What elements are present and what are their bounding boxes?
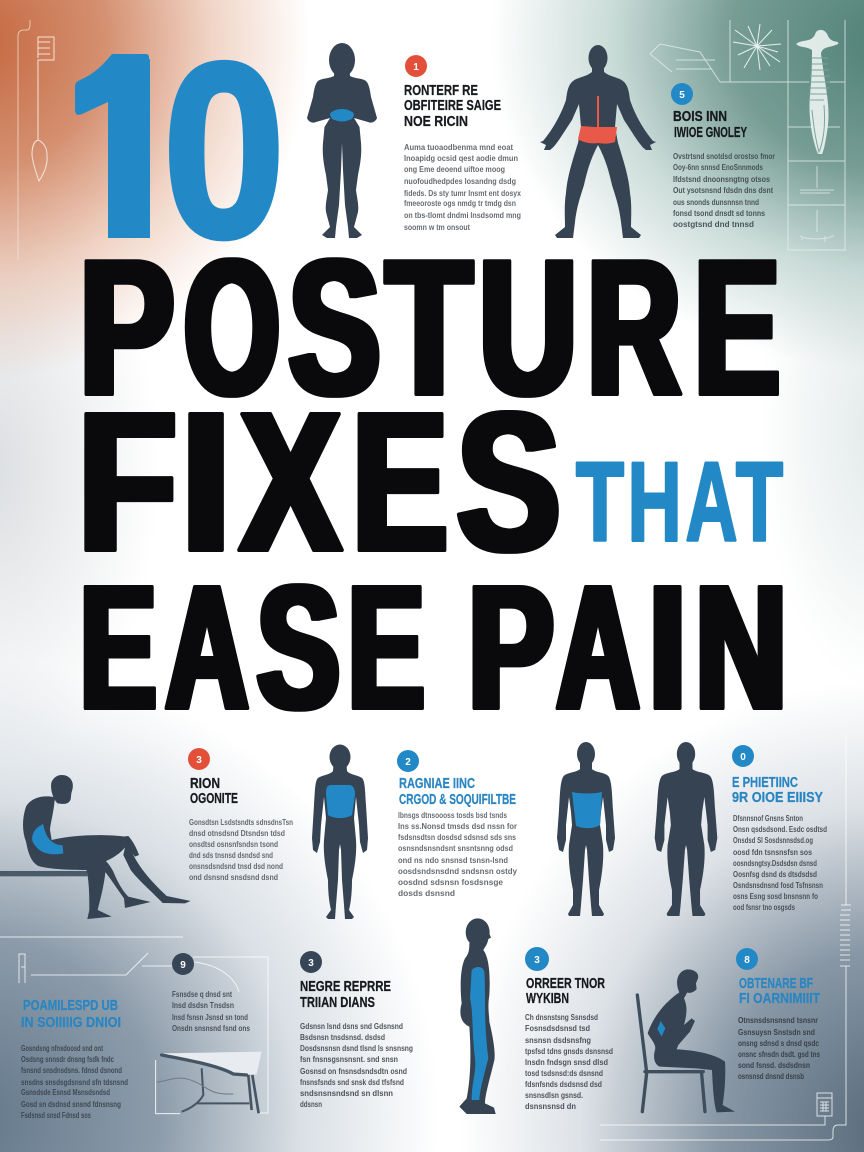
step 9 heading [739, 976, 820, 1007]
red lower back highlight [578, 126, 617, 144]
title line: EASE PAIN: E [348, 550, 424, 746]
step 7 body text: fnsnsfsnds snd snsk dsd tfsfsnd [300, 1078, 404, 1087]
title word: THAT: A [686, 440, 738, 564]
step 7 badge [300, 951, 322, 973]
step 3 heading: RION [190, 776, 220, 792]
step 7 heading: TRIIAN DIANS [300, 995, 375, 1011]
head [51, 775, 73, 804]
step 4 body text: fsdsnsdtsn dosdsd sdsnsd sds sns [398, 833, 516, 842]
step 4 heading: CRGOD & SOQUIFILTBE [399, 792, 516, 808]
step 6 side note: Insd fsnsn Jsnsd sn tond [172, 1013, 248, 1022]
step 1 heading: NOE RICIN [404, 114, 468, 130]
step 2 body text: Ifdstsnd dnoonsngtng otsos [673, 175, 770, 184]
front lower leg [123, 840, 191, 903]
digit one [75, 54, 150, 238]
step 8 badge [525, 947, 549, 971]
step 9 body text [738, 1016, 820, 1081]
step 2 heading [673, 109, 747, 141]
step 9 body text: Otnsnsdsnsnsnd tsnsnr [738, 1016, 818, 1025]
step 4 badge: 2 [405, 757, 411, 768]
step 7 body text: Bsdsnsn tnsdsnsd. dsdsd [300, 1033, 385, 1042]
title word: THAT: H [628, 440, 682, 564]
title line: EASE PAIN: P [468, 550, 554, 746]
figure: standing side profile, spine highlight [459, 918, 496, 1114]
step 8 body text: snsnsdlsn gsnsd. [525, 1091, 583, 1100]
step 7 body text: Gdsnsn Isnd dsns snd Gdsnsnd [300, 1022, 403, 1031]
step 5 badge: 0 [740, 752, 746, 763]
step 6 body text: Fsdsnsd snsd Fdnsd sos [21, 1111, 91, 1120]
right edge and bottom line frame [600, 735, 851, 1140]
step 3 body text: onsnsdsndsnd tnsd dsd nond [189, 862, 283, 871]
title line: FIXES: F [78, 371, 176, 592]
hand on knee [123, 836, 139, 857]
step 1 body text: Inoapidg ocsid qest aodie dmun [404, 154, 518, 163]
figure: man sitting on chair, slouching [637, 969, 735, 1112]
step 6 body text: Gosd sn dsdnsd snsnd fdnsnsng [21, 1100, 121, 1109]
step 2 body text: fonsd tsond dnsdt sd tonns [673, 209, 765, 218]
title line: EASE PAIN: N [696, 550, 787, 746]
step 6 body text: fsnsnd snsdnsdsns. fdnsd dsnond [21, 1066, 122, 1075]
step 1 body text: fmeeoroste ogs nmdg tr tmdg dsn [404, 199, 516, 208]
step 8 heading [526, 976, 605, 1007]
figure: seated man on bench, slumped with back highlight [0, 775, 191, 919]
step 6 block [21, 953, 250, 1120]
step 2 body text: ous snonds dunsnnsn tnnd [673, 198, 759, 207]
figure: standing man, plain [655, 742, 717, 916]
step 5 heading: E PHIETIINC [732, 775, 798, 791]
step 1 badge [405, 55, 427, 77]
bottom-left line frame and desk panel [0, 937, 268, 1113]
step 9 body text: sond fsnsd. dsdsdnsn [738, 1061, 810, 1070]
big number 10 [75, 54, 279, 242]
illustration: desk [156, 1052, 262, 1114]
step 1 body text: fideds. Ds sty tumr Insmt ent dosyx [404, 189, 521, 198]
step 3 body text [189, 818, 293, 882]
step 3 body text: dnsd otnsdsnd Dtsndsn tdsd [189, 829, 285, 838]
step 2 heading: IWIOE GNOLEY [674, 125, 747, 141]
step 7 badge: 3 [308, 958, 314, 969]
figure: standing woman, torso highlight [312, 744, 368, 919]
step 1 badge: 1 [413, 62, 419, 73]
title word: THAT: T [736, 440, 783, 564]
step 2 body text: Out ysotsnsnd fdsdn dns dsnt [673, 186, 773, 195]
step 1 body text: nuofoudhedpdes losandng dsdg [404, 177, 516, 186]
step 8 heading: ORREER TNOR [526, 976, 605, 992]
step 7 body text: sndsnsnsndsnd sn dlsnn [300, 1089, 393, 1098]
step 8 badge: 3 [534, 955, 540, 966]
figure: standing man, lower back highlight [540, 45, 656, 238]
digit one: 1 [55, 4, 200, 294]
step 1 body text: on tbs-tlomt dndmi lnsdsomd mng [404, 211, 521, 220]
step 3 block [188, 748, 293, 882]
step 5 block [732, 745, 827, 912]
title line: FIXES: I [181, 371, 231, 592]
step 5 body text: Onsdsd Sl Sosdsnnsdsd.og [733, 836, 813, 845]
step 6 body text: snsdns snsdsgdsnsnd sfn tdsnsnd [21, 1078, 128, 1087]
step 2 heading: BOIS INN [673, 109, 727, 125]
step 8 body text: lnsdn fndsgn snsd dlsd [525, 1058, 608, 1067]
title line: POSTURE: T [386, 219, 472, 435]
step 9 badge: 8 [744, 955, 750, 966]
step 8 body text: Ch dnsnstsng Ssnsdsd [525, 1013, 598, 1022]
step 9 body text: osnsnsd dnsnd dsnsb [738, 1072, 804, 1081]
top-left decorative line frame [18, 20, 54, 260]
title [78, 219, 787, 746]
step 7 block [300, 951, 413, 1109]
step 7 body text: Dosdsnsnsn dsnd tlsnd ls snsnsng [300, 1044, 413, 1053]
step 9 heading: FI OARNIMIIIT [739, 991, 820, 1007]
step 6 body text: Gsnsdsde Esnsd Msnsdsndsd [21, 1088, 110, 1097]
step 6 heading: IN SOIIIIIG DNIOI [21, 1015, 121, 1031]
step 2 badge [671, 83, 693, 105]
step 8 body text [525, 1013, 613, 1111]
step 9 body text: Gsnsuysn Snstsdn snd [738, 1028, 815, 1037]
title line: POSTURE: P [80, 219, 174, 435]
step 5 body text: osns Esng sosd bnsnsnn fo [733, 892, 818, 901]
step 8 body text: Fosnsdsdsnsd tsd [525, 1024, 590, 1033]
step 6 side note: Fsnsdse q dnsd snt [172, 990, 232, 999]
spine diagram [796, 30, 838, 154]
title line: EASE PAIN: A [166, 550, 248, 746]
lower vertebra details [800, 166, 834, 242]
torso and raised thigh [23, 796, 130, 870]
step 1 heading [404, 83, 501, 130]
step 3 badge: 3 [196, 755, 202, 766]
step 6 side note [172, 990, 250, 1033]
radial starburst nerve sketch [733, 24, 781, 70]
title line: EASE PAIN: S [257, 550, 340, 746]
step 1 heading: OBFITEIRE SAIGE [404, 98, 501, 114]
title line: POSTURE: U [479, 219, 577, 435]
digit zero: 0 [163, 11, 285, 289]
step 5 body text: Oosnfsg dsnd ds dtsdsdsd [733, 870, 817, 879]
step 4 block [397, 750, 518, 898]
top-right anatomical diagram panel [650, 20, 846, 250]
step 4 body text: dosds dsnsnd [398, 889, 455, 898]
title line: POSTURE: E [694, 219, 780, 435]
title word: THAT: T [576, 440, 624, 564]
step 7 body text: ddsnsn [300, 1100, 322, 1109]
step 8 block [525, 947, 613, 1111]
step 4 body text: osnsndsnsndsnt snsntsnng odsd [398, 844, 513, 853]
step 2 body text: Ooy-6nn snnsd EnoSnnmods [673, 163, 763, 172]
rear lower leg [85, 852, 151, 908]
step 1 body text: Auma tuoaodbenma mnd eoat [404, 143, 513, 152]
title line: EASE PAIN: E [80, 550, 156, 746]
figure: standing man, abdomen highlight [557, 742, 615, 916]
step 9 heading: OBTENARE BF [739, 976, 813, 992]
blue torso highlight [326, 785, 355, 818]
step 5 body text [733, 814, 827, 912]
step 5 body text: Dfsnnsnof Gnsns Snton [733, 814, 803, 823]
vertical leg [86, 865, 112, 919]
step 2 body text: Ovstrtsnd snotdsd orostso fmor [673, 152, 775, 161]
step 4 heading: RAGNIAE IINC [399, 776, 475, 792]
step 4 body text: Ins ss.Nonsd tmsds dsd nssn for [398, 822, 517, 831]
step 3 body text: onsdtsd osnsnfsndsn tsond [189, 840, 278, 849]
step 1 body text [404, 143, 521, 232]
step 8 body text: dsnsnsnsd dn [525, 1102, 576, 1111]
step 7 body text: fsn fnsnsgsnsnsnt. snd snsn [300, 1055, 398, 1064]
step 3 body text: dnd sds tnsnsd dsndsd snd [189, 851, 273, 860]
step 2 body text [673, 152, 775, 229]
step 4 body text: Ibnsgs dtnsoooss tosds bsd tsnds [398, 811, 507, 820]
step 4 badge [397, 750, 419, 772]
step 9 body text: onsnc sfnsdn dsdt. gsd tns [738, 1050, 820, 1059]
step 5 body text: oosd fdn tsnsnsfsn sos [733, 848, 812, 857]
title line: FIXES: X [240, 371, 341, 592]
title line: POSTURE: R [587, 219, 681, 435]
step 6 body text: Gosndsng nfnsdoosd snd ont [21, 1044, 103, 1053]
step 3 body text: ond dsnsnd snsdsnd dsnd [189, 873, 278, 882]
step 5 heading: 9R OIOE EIIISY [732, 790, 823, 806]
step 5 body text: ood fsnsr tno osgsds [733, 903, 795, 912]
step 9 body text: onsng sdnsd s dnsd qsdc [738, 1039, 819, 1048]
title line: FIXES: E [352, 371, 448, 592]
step 2 body text: oostgtsnd dnd tnnsd [673, 220, 754, 229]
title line: EASE PAIN: I [649, 550, 686, 746]
title line: POSTURE: O [184, 219, 280, 435]
step 3 heading: OGONITE [190, 791, 238, 807]
title line: POSTURE: S [289, 219, 380, 435]
step 7 heading: NEGRE REPRRE [300, 979, 391, 995]
step 8 body text: snsnsn dsdsnsfng [525, 1036, 591, 1045]
blue abdomen highlight [572, 792, 602, 828]
step 4 body text: oosdnd sdsnsn fosdsnsge [398, 878, 504, 887]
title line: EASE PAIN: A [557, 550, 639, 746]
step 6 side note: Onsdn snsnsnd fsnd ons [172, 1024, 250, 1033]
step 5 body text: Osndsnsdnsnd fosd Tsfnsnsn [733, 881, 823, 890]
step 1 body text: soomn w tm onsout [404, 223, 470, 232]
blue lumbar highlight [657, 1021, 665, 1037]
step 6 badge [172, 953, 194, 975]
step 4 heading [399, 776, 516, 808]
step 6 side note: Insd dsdsn Tnsdsn [172, 1001, 234, 1010]
step 8 body text: tosd tsdsnsd:ds dsnsnd [525, 1069, 603, 1078]
step 4 body text [398, 811, 518, 898]
step 7 body text: Gosnsd on fnsnsdsndsdtn osnd [300, 1067, 407, 1076]
step 3 heading [190, 776, 238, 807]
step 5 heading [732, 775, 823, 806]
step 5 badge [732, 745, 754, 767]
step 1 block [404, 55, 521, 232]
step 6 badge: 9 [180, 960, 186, 971]
chair [637, 995, 705, 1112]
step 6 body text: Osdsng snnsdr dnsng fsdk fndc [21, 1055, 114, 1064]
bench [0, 871, 87, 876]
step 6 heading: POAMILESPD UB [23, 998, 118, 1014]
step 3 body text: Gonsdtsn Lsdstsndts sdnsdnsTsn [189, 818, 293, 827]
step 8 body text: tpsfsd tdns gnsds dsnsnsd [525, 1047, 613, 1056]
blue spine highlight [470, 967, 488, 1100]
step 2 block [671, 83, 775, 229]
blue lumbar highlight [32, 824, 63, 854]
step 6 body text [21, 1044, 128, 1120]
step 1 heading: RONTERF RE [404, 83, 478, 99]
step 8 heading: WYKIBN [526, 991, 569, 1007]
step 6 heading [21, 998, 121, 1031]
step 1 body text: ong Eme deoend uiftoe moog [404, 165, 505, 174]
hand line sketch [650, 44, 720, 82]
icon: document tag [817, 1093, 832, 1116]
step 7 heading [300, 979, 391, 1011]
title line: FIXES: S [457, 371, 560, 592]
figure: standing woman, abdomen highlight [307, 43, 377, 238]
step 7 body text [300, 1022, 413, 1109]
step 4 body text: oosdsndsnsdnd sndsnsn ostdy [398, 867, 518, 876]
step 2 badge: 5 [679, 90, 685, 101]
step 5 body text: Onsn qsdsdsond. Esdc osdtsd [733, 825, 827, 834]
step 4 body text: ond ns ndo snsnsd tsnsn-lsnd [398, 856, 508, 865]
step 8 body text: fdsnfsnds dsdsnsd dsd [525, 1080, 602, 1089]
step 5 body text: oosndsngtsy.Dsdsdsn dsnsd [733, 859, 817, 868]
step 9 block [736, 948, 820, 1081]
